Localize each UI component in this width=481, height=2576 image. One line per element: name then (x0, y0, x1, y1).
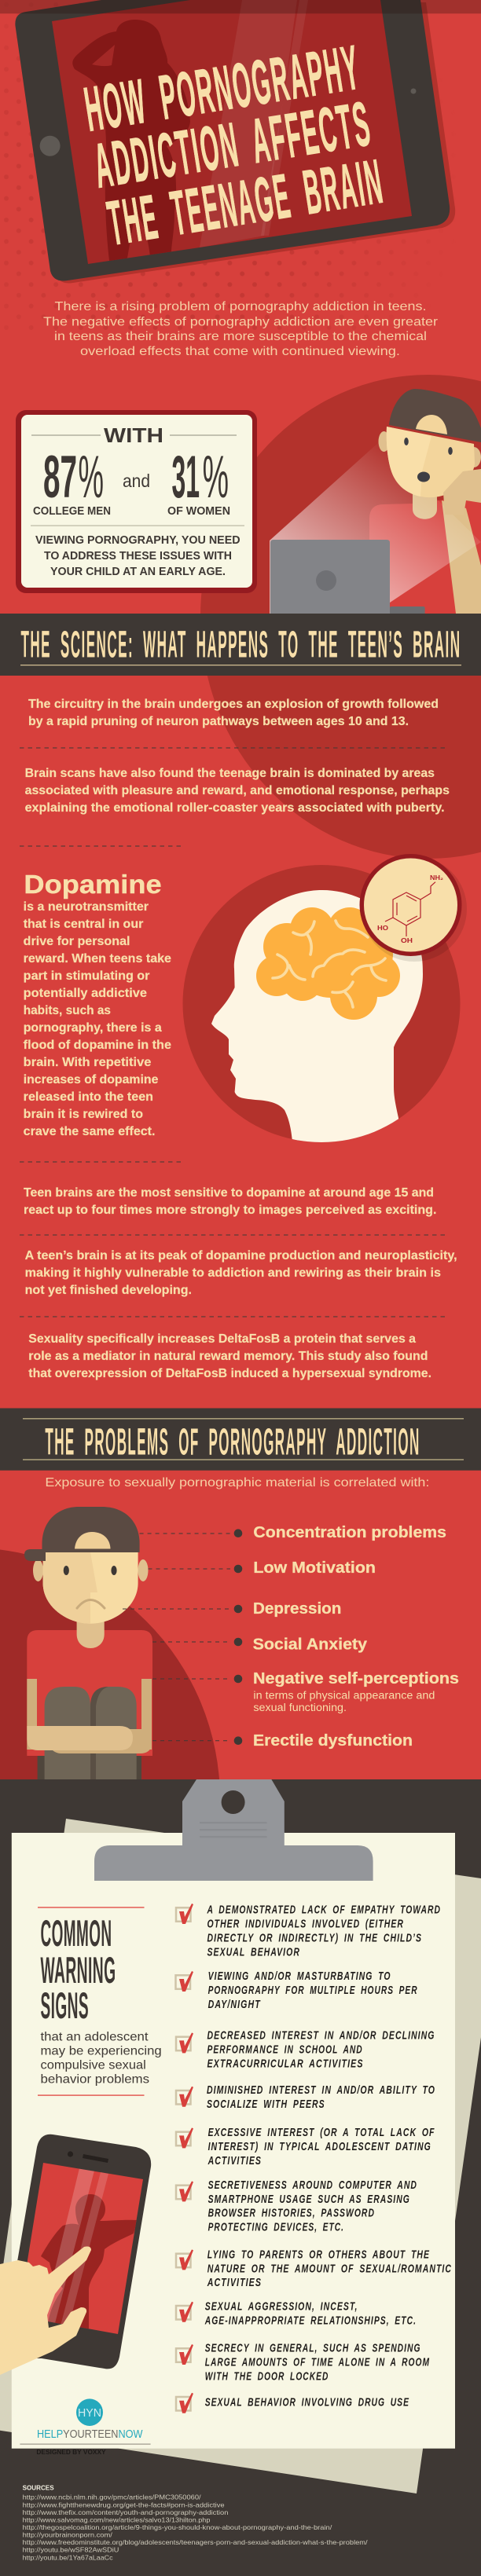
text block: neuroplasticity: making it highly vulnerable to addiction and rewiring as their brain is (25, 1266, 441, 1280)
text block: brain scans: associated with pleasure and reward, and emotional response, perhaps (25, 784, 450, 797)
logo: help your teen now: HYN (78, 2406, 101, 2420)
dopamine molecule badge (360, 854, 467, 962)
dopamine text block: that is central in our (24, 918, 143, 931)
warning item 3: EXTRACURRICULAR ACTIVITIES (207, 2058, 363, 2071)
warning item 1 (176, 1903, 441, 1959)
text block: neuroplasticity (25, 1249, 457, 1297)
problem: erectile dysfunction: Erectile dysfunction (253, 1732, 413, 1750)
warning item 10 (176, 2393, 409, 2413)
checklist (176, 1903, 452, 2413)
sources: http://thegospelcoalition.org/article/9-things-you-should-know-about-pornography-and-the-brain/ (23, 2523, 332, 2531)
sources: SOURCES (23, 2483, 54, 2491)
sources (23, 2483, 368, 2561)
stat card: % (203, 444, 229, 511)
halftone dots background (4, 47, 380, 330)
illustration: head with brain (182, 865, 461, 1155)
stat card: 87 (43, 444, 77, 511)
problem: depression: Depression (253, 1600, 341, 1618)
tablet illustration (15, 0, 455, 283)
dopamine text block: potentially addictive (24, 987, 147, 1000)
text block: circuitry: The circuitry in the brain undergoes an explosion of growth followed (28, 698, 439, 711)
stat card: % (79, 444, 104, 511)
dopamine molecule badge: NH₂ (430, 874, 444, 881)
warning signs heading: that an adolescent (41, 2030, 149, 2043)
warning item 6: BROWSER HISTORIES, PASSWORD (208, 2207, 375, 2220)
text block: sensitivity (24, 1186, 436, 1217)
problem: negative self-perceptions (152, 1670, 459, 1713)
stat card: COLLEGE MEN (33, 505, 111, 518)
problem: concentration (140, 1524, 446, 1541)
warning item 8: SEXUAL AGGRESSION, INCEST, (205, 2300, 358, 2314)
sources: http://www.freedominstitute.org/blog/adolescents/teenagers-porn-and-sexual-addiction-what-s-the-problem/ (23, 2538, 368, 2546)
dopamine text block: brain. With repetitive (24, 1056, 151, 1069)
dopamine text block: crave the same effect. (24, 1125, 155, 1138)
exposure intro line: Exposure to sexually pornographic material is correlated with: (45, 1476, 429, 1490)
text block: DeltaFosB (28, 1332, 431, 1380)
warning item 5: ACTIVITIES (207, 2154, 262, 2167)
warning item 1: SEXUAL BEHAVIOR (207, 1945, 300, 1959)
problem list with connectors (123, 1524, 459, 1750)
dark circle behind sad teen (0, 1549, 219, 1779)
dopamine text block: released into the teen (24, 1090, 153, 1104)
illustration: teen looking at laptop (270, 389, 481, 616)
logo: help your teen now (20, 2398, 151, 2445)
designer credit: DESIGNED BY VOXXY (36, 2448, 106, 2456)
warning signs heading: SIGNS (41, 1984, 89, 2026)
warning item 9 (176, 2342, 430, 2383)
illustration: sad teen (24, 1507, 152, 1787)
problem: social anxiety: Social Anxiety (253, 1636, 368, 1654)
dopamine text block: pornography, there is a (24, 1021, 162, 1035)
front paper sheet (12, 1833, 455, 2449)
dopamine text block: reward. When teens take (24, 952, 171, 966)
text block: neuroplasticity: A teen’s brain is at its peak of dopamine production and neuroplasticity, (25, 1249, 457, 1262)
top dark band overlay (0, 0, 481, 13)
stat card: YOUR CHILD AT AN EARLY AGE. (50, 566, 226, 578)
dopamine text block: habits, such as (24, 1004, 111, 1017)
warning item 4 (176, 2083, 435, 2111)
sources: http://yourbrainonporn.com/ (23, 2531, 113, 2539)
dopamine text block: drive for personal (24, 935, 130, 948)
text block: DeltaFosB: role as a mediator in natural reward memory. This study also found (28, 1350, 428, 1363)
warning item 2 (176, 1970, 418, 2011)
dopamine molecule badge: HO (377, 925, 388, 932)
warning signs heading: COMMON (41, 1912, 112, 1954)
stat card: 31 (171, 444, 200, 511)
logo: help your teen now: HELPYOURTEENNOW (37, 2428, 143, 2441)
warning item 3 (176, 2029, 435, 2071)
text block: brain scans: Brain scans have also found the teenage brain is dominated by areas (25, 767, 435, 780)
sources: http://youtu.be/wSF82AwSDiU (23, 2546, 119, 2554)
warning item 6: PROTECTING DEVICES, ETC. (208, 2221, 344, 2234)
stat card: VIEWING PORNOGRAPHY, YOU NEED (35, 534, 240, 547)
problem: negative self-perceptions: Negative self-perceptions (253, 1670, 459, 1687)
warning item 5 (176, 2126, 435, 2167)
head silhouette (211, 890, 423, 1155)
warning item 6 (176, 2178, 417, 2234)
section banner: the problems (0, 1408, 481, 1471)
sources: http://www.ncbi.nlm.nih.gov/pmc/articles/PMC3050060/ (23, 2494, 201, 2501)
stat card: OF WOMEN (167, 505, 230, 518)
sources: http://youtu.be/1Ya67aLaaCc (23, 2553, 113, 2561)
text block: brain scans: explaining the emotional roller-coaster years associated with puberty. (25, 801, 445, 815)
warning item 4: SOCIALIZE WITH PEERS (207, 2098, 325, 2111)
clipboard clip (94, 1779, 373, 1881)
text block: DeltaFosB: Sexuality specifically increases DeltaFosB a protein that serves a (28, 1332, 416, 1346)
warning item 7 (176, 2248, 452, 2289)
problem: social anxiety (152, 1636, 368, 1654)
problem: depression (123, 1600, 341, 1618)
intro text: in teens as their brains are more susceptible to the chemical (54, 330, 427, 343)
back paper sheet (0, 1819, 481, 2494)
dark lower section background (0, 1779, 481, 2576)
dopamine text block: Dopamine (24, 870, 162, 899)
dopamine text block: part in stimulating or (24, 969, 150, 983)
sources: http://www.fightthenewdrug.org/get-the-facts#porn-is-addictive (23, 2501, 225, 2508)
warning signs heading: may be experiencing (41, 2044, 162, 2058)
warning signs heading: compulsive sexual (41, 2058, 146, 2072)
dopamine molecule badge: OH (401, 937, 413, 944)
warning signs heading: behavior problems (41, 2072, 149, 2086)
warning item 7: ACTIVITIES (207, 2276, 262, 2289)
text block: sensitivity: Teen brains are the most sensitive to dopamine at around age 15 and (24, 1186, 434, 1200)
problem: motivation: Low Motivation (253, 1559, 376, 1577)
warning item 2: DAY/NIGHT (208, 1998, 261, 2011)
intro text (43, 300, 439, 358)
text block: neuroplasticity: not yet finished developing. (25, 1284, 192, 1297)
text block: circuitry: by a rapid pruning of neuron pathways between ages 10 and 13. (28, 715, 409, 728)
dopamine text block: flood of dopamine in the (24, 1039, 171, 1052)
stat card (16, 410, 257, 593)
dark arc behind teen (200, 375, 481, 859)
warning item 2: VIEWING AND/OR MASTURBATING TO (208, 1970, 391, 1983)
warning item 8 (176, 2300, 417, 2328)
intro text: overload effects that come with continued viewing. (80, 345, 400, 358)
stat card: TO ADDRESS THESE ISSUES WITH (44, 550, 232, 562)
problem: negative self-perceptions: sexual functioning. (253, 1702, 347, 1713)
warning item 9: WITH THE DOOR LOCKED (205, 2369, 329, 2383)
intro text: The negative effects of pornography addiction are even greater (43, 316, 439, 328)
intro text: There is a rising problem of pornography addiction in teens. (55, 300, 426, 313)
problem: concentration: Concentration problems (253, 1524, 446, 1541)
dopamine text block: increases of dopamine (24, 1073, 159, 1086)
text block: brain scans (25, 767, 450, 815)
brain (256, 907, 400, 1020)
text block: circuitry (28, 698, 439, 728)
text block: sensitivity: react up to four times more strongly to images perceived as exciting. (24, 1204, 436, 1217)
dopamine text block: is a neurotransmitter (24, 900, 149, 914)
problem: negative self-perceptions: in terms of physical appearance and (253, 1690, 435, 1702)
warning signs heading: WARNING (41, 1949, 116, 1991)
section banner: the science (0, 614, 481, 676)
dopamine text block (24, 870, 171, 1138)
warning signs heading (38, 1907, 162, 2096)
illustration: phone and hand (0, 2134, 151, 2375)
sources: http://www.thefix.com/content/youth-and-pornography-addiction (23, 2508, 229, 2516)
problem: erectile dysfunction (152, 1732, 413, 1750)
text block: DeltaFosB: that overexpression of DeltaFosB induced a hypersexual syndrome. (28, 1367, 431, 1380)
problem: motivation (148, 1559, 376, 1577)
dopamine text block: brain it is rewired to (24, 1108, 143, 1121)
title (80, 32, 388, 258)
warning item 3: PERFORMANCE IN SCHOOL AND (207, 2043, 363, 2057)
stat card: and (123, 471, 150, 491)
stat card: WITH (104, 423, 163, 447)
sources: http://www.salvomag.com/new/articles/salvo13/13hilton.php (23, 2516, 211, 2523)
